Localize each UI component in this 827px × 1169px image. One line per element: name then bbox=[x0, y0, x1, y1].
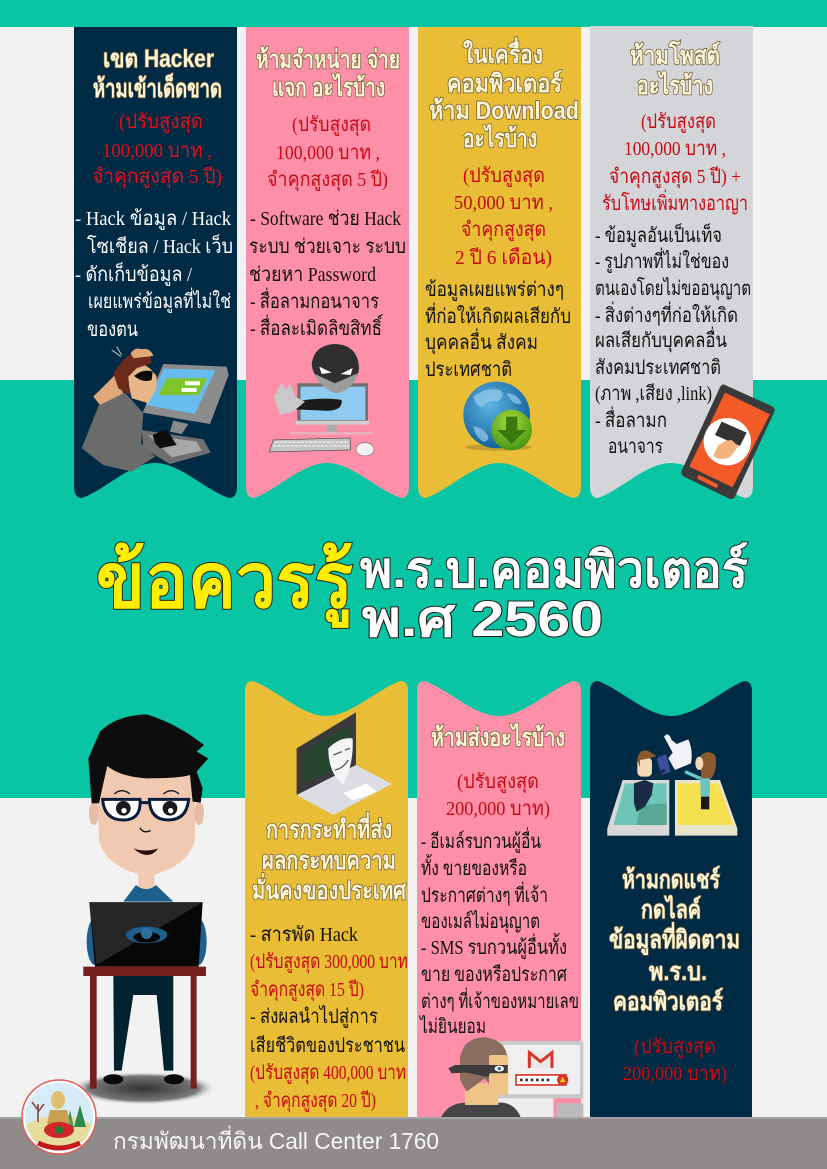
list: ของเมล์ไม่อนุญาต bbox=[421, 910, 540, 934]
panel: do not post bbox=[590, 26, 775, 499]
description: ประเทศชาติ bbox=[425, 359, 512, 381]
footer text: กรมพัฒนาที่ดิน Call Center 1760 bbox=[113, 1125, 439, 1154]
ribbon pink bbox=[246, 27, 409, 498]
list: - สื่อลามกอนาจาร bbox=[250, 287, 379, 313]
list: - รูปภาพที่ไม่ใช่ของ bbox=[595, 247, 729, 274]
list: (ภาพ ,เสียง ,link) bbox=[595, 383, 712, 405]
list bbox=[75, 208, 233, 341]
subtitle: พ.ศ 2560 bbox=[362, 591, 603, 647]
penalty: 2 ปี 6 เดือน) bbox=[455, 247, 552, 269]
list bbox=[595, 222, 751, 458]
list: ทั้ง ขายของหรือ bbox=[421, 854, 527, 880]
heading: พ.ร.บ. bbox=[649, 958, 707, 986]
list: ขาย ของหรือประกาศ bbox=[421, 964, 567, 986]
heading: คอมพิวเตอร์ bbox=[447, 69, 562, 98]
list: จำคุกสูงสุด 15 ปี) bbox=[250, 979, 364, 1002]
list: ไม่ยินยอม bbox=[418, 1015, 486, 1038]
heading: ห้าม Download bbox=[429, 97, 579, 125]
penalty: 50,000 บาท , bbox=[454, 192, 553, 214]
list: ตนเองโดยไม่ขออนุญาต bbox=[595, 277, 751, 301]
main title: ข้อควรรู้ bbox=[96, 539, 353, 628]
heading bbox=[429, 37, 579, 153]
list bbox=[249, 208, 406, 340]
penalty bbox=[602, 111, 748, 215]
list: (ปรับสูงสุด 300,000 บาท bbox=[250, 951, 408, 974]
heading: ห้ามโพสต์ bbox=[630, 40, 720, 70]
list: - ส่งผลนำไปสู่การ bbox=[250, 1005, 378, 1029]
list: ประกาศต่างๆ ที่เจ้า bbox=[421, 881, 548, 907]
icon: gmail hacker bbox=[440, 1037, 583, 1120]
footer bar bbox=[0, 1117, 827, 1169]
list: ต่างๆ ที่เจ้าของหมายเลข bbox=[421, 987, 579, 1013]
icon: anonymous laptop bbox=[297, 712, 392, 815]
penalty: รับโทษเพิ่มทางอาญา bbox=[602, 189, 748, 215]
list bbox=[418, 827, 579, 1038]
ribbon yellow bbox=[245, 681, 408, 1117]
heading: ห้ามเข้าเด็ดขาด bbox=[93, 73, 222, 103]
subtitle bbox=[360, 542, 748, 647]
penalty: (ปรับสูงสุด bbox=[457, 771, 539, 794]
ribbon navy bbox=[590, 681, 752, 1117]
heading bbox=[609, 865, 740, 1016]
list: โซเชียล / Hack เว็บ bbox=[87, 233, 233, 258]
ribbon grey bbox=[590, 26, 753, 498]
heading: ในเครื่อง bbox=[463, 37, 543, 69]
penalty bbox=[267, 114, 388, 192]
heading: แจก อะไรบ้าง bbox=[272, 72, 385, 102]
penalty: (ปรับสูงสุด bbox=[292, 114, 371, 137]
list: ช่วยหา Password bbox=[249, 264, 376, 286]
list bbox=[250, 924, 408, 1113]
list: - SMS รบกวนผู้อื่นทั้ง bbox=[421, 933, 567, 960]
heading: ห้ามจำหน่าย จ่าย bbox=[256, 46, 400, 74]
panel: do not sell bbox=[246, 27, 409, 498]
list: - Software ช่วย Hack bbox=[250, 208, 401, 230]
description bbox=[425, 279, 571, 381]
heading: ผลกระทบความ bbox=[262, 847, 396, 875]
list: - ข้อมูลอันเป็นเท็จ bbox=[595, 222, 722, 248]
icon: globe download bbox=[463, 382, 532, 451]
ribbon pink bbox=[417, 681, 581, 1117]
ribbon navy bbox=[74, 27, 237, 498]
heading: อะไรบ้าง bbox=[637, 70, 713, 100]
heading: การกระทำที่ส่ง bbox=[266, 812, 392, 844]
penalty: 200,000 บาท) bbox=[623, 1063, 727, 1085]
icon: hacker at computer bbox=[82, 347, 229, 472]
heading: กดไลค์ bbox=[641, 894, 701, 924]
list: - สิ่งต่างๆที่ก่อให้เกิด bbox=[595, 301, 738, 327]
penalty: จำคุกสูงสุด 5 ปี) bbox=[92, 166, 222, 189]
list: - สื่อละเมิดลิขสิทธิ์ bbox=[250, 313, 384, 340]
penalty: 100,000 บาท , bbox=[102, 140, 212, 162]
penalty: จำคุกสูงสุด bbox=[461, 219, 546, 242]
list: - อีเมล์รบกวนผู้อื่น bbox=[421, 827, 541, 854]
penalty bbox=[623, 1036, 727, 1085]
illustration: man at laptop bbox=[70, 714, 217, 1105]
penalty bbox=[92, 111, 222, 189]
subtitle: พ.ร.บ.คอมพิวเตอร์ bbox=[360, 542, 748, 598]
penalty: (ปรับสูงสุด bbox=[641, 111, 716, 134]
penalty: 200,000 บาท) bbox=[446, 798, 550, 820]
list: ระบบ ช่วยเจาะ ระบบ bbox=[249, 236, 406, 258]
heading: คอมพิวเตอร์ bbox=[613, 987, 723, 1016]
list: - Hack ข้อมูล / Hack bbox=[75, 208, 231, 231]
penalty: (ปรับสูงสุด bbox=[463, 165, 545, 188]
penalty: (ปรับสูงสุด bbox=[119, 111, 203, 134]
list: สังคมประเทศชาติ bbox=[595, 357, 721, 379]
description: ที่ก่อให้เกิดผลเสียกับ bbox=[425, 302, 571, 328]
heading bbox=[252, 812, 407, 905]
list: - สื่อลามก bbox=[595, 406, 667, 432]
heading bbox=[93, 45, 222, 103]
panel: downloads bbox=[418, 27, 581, 498]
penalty: (ปรับสูงสุด bbox=[634, 1036, 716, 1059]
penalty: จำคุกสูงสุด 5 ปี) + bbox=[609, 166, 741, 189]
description: ข้อมูลเผยแพร่ต่างๆ bbox=[425, 279, 564, 302]
title bbox=[96, 539, 748, 647]
heading: เขต Hacker bbox=[103, 45, 214, 73]
list: ผลเสียกับบุคคลอื่น bbox=[595, 326, 727, 353]
icon: like and phones bbox=[607, 734, 737, 836]
heading: มั่นคงของประเทศ bbox=[252, 873, 407, 905]
panel: do not share bbox=[590, 681, 752, 1117]
penalty: 100,000 บาท , bbox=[624, 138, 726, 160]
panel: hacker zone bbox=[74, 27, 237, 498]
heading: ห้ามกดแชร์ bbox=[622, 865, 720, 894]
penalty: 100,000 บาท , bbox=[276, 142, 380, 164]
icon: phone post bbox=[681, 384, 775, 499]
penalty bbox=[454, 165, 553, 269]
list: เผยแพร่ข้อมูลที่ไม่ใช่ bbox=[88, 287, 231, 314]
icon: thief in monitor bbox=[269, 344, 374, 456]
heading: อะไรบ้าง bbox=[463, 123, 537, 153]
heading bbox=[256, 46, 400, 102]
list: , จำคุกสูงสุด 20 ปี) bbox=[255, 1090, 376, 1113]
description: บุคคลอื่น สังคม bbox=[425, 328, 538, 355]
penalty bbox=[446, 771, 550, 820]
panel: do not send bbox=[417, 681, 583, 1120]
list: - สารพัด Hack bbox=[250, 924, 358, 946]
ribbon yellow bbox=[418, 27, 581, 498]
panel: national security bbox=[245, 681, 408, 1117]
list: (ปรับสูงสุด 400,000 บาท bbox=[250, 1062, 406, 1085]
penalty: จำคุกสูงสุด 5 ปี) bbox=[267, 169, 388, 192]
heading bbox=[630, 40, 720, 100]
list: เสียชีวิตของประชาชน bbox=[250, 1035, 405, 1057]
list: ของตน bbox=[87, 319, 138, 341]
list: - ดักเก็บข้อมูล / bbox=[75, 261, 192, 287]
list: อนาจาร bbox=[608, 436, 663, 458]
heading: ข้อมูลที่ผิดตาม bbox=[609, 922, 740, 956]
heading: ห้ามส่งอะไรบ้าง bbox=[431, 722, 565, 752]
logo: land development department bbox=[22, 1080, 96, 1154]
